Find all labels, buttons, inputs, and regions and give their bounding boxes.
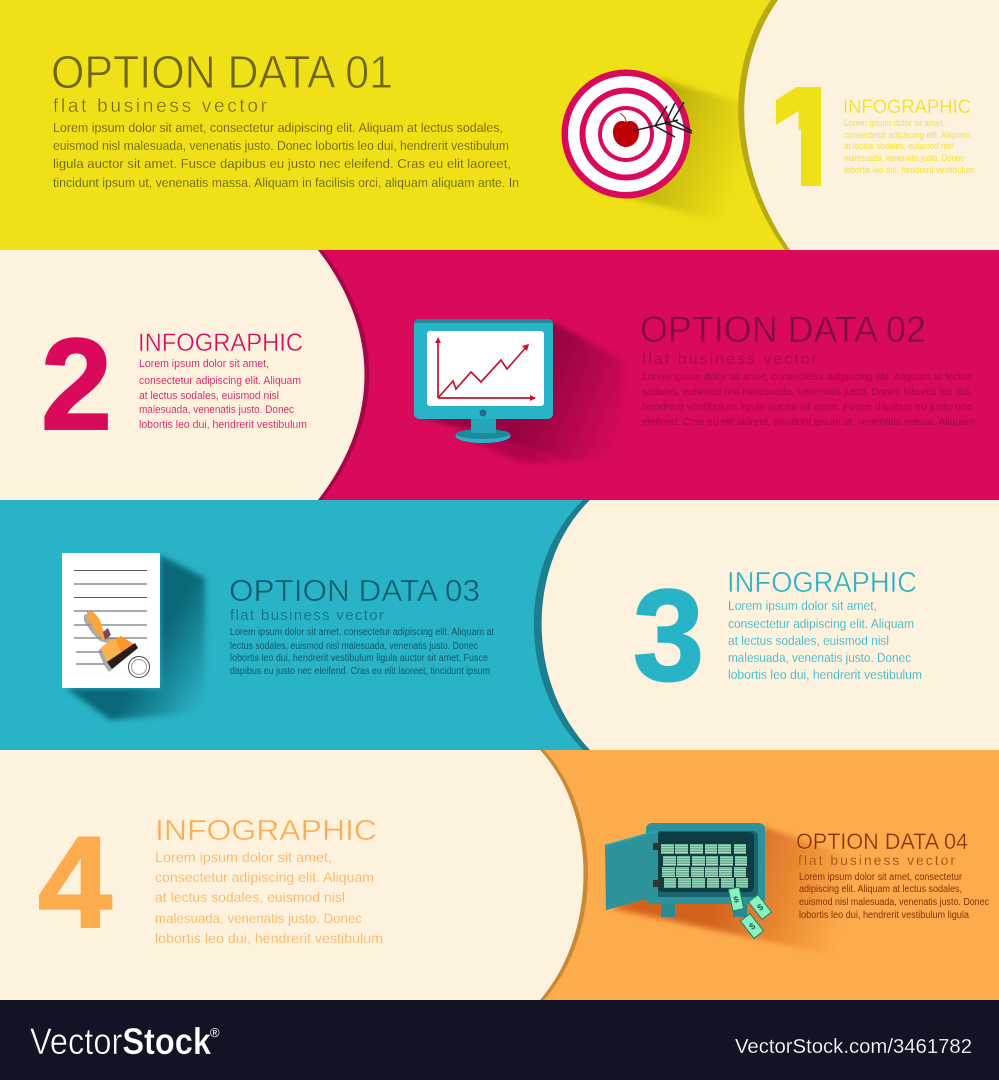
body text 1 xyxy=(53,121,519,190)
number 4: 4 xyxy=(38,809,112,955)
panel: option 04 xyxy=(0,750,999,1000)
side text 1: lobortis leo dui, hendrerit vestibulum xyxy=(844,165,975,175)
body text 1: euismod nisl malesuada, venenatis justo. Donec lobortis leo dui, hendrerit vestibulum xyxy=(53,139,509,153)
icon: target with apple and arrow xyxy=(562,70,750,230)
side text 1: at lectus sodales, euismod nisl xyxy=(844,141,953,151)
side text 2: at lectus sodales, euismod nisl xyxy=(139,390,279,402)
body text 4: Lorem ipsum dolor sit amet, consectetur xyxy=(799,872,963,883)
cream number panel 2 xyxy=(0,250,369,500)
panel: option 02 xyxy=(0,250,999,500)
watermark logo: VectorStock xyxy=(30,1021,211,1062)
side text 4 xyxy=(155,849,383,946)
body text 3 xyxy=(230,627,494,677)
icon: open safe with money: $ xyxy=(733,894,740,905)
side text 4: at lectus sodales, euismod nisl xyxy=(155,889,345,905)
subtitle 1: flat business vector xyxy=(53,96,268,117)
side text 2: malesuada, venenatis justo. Donec xyxy=(139,404,294,416)
body text 4: adipiscing elit. Aliquam at lectus sodales, xyxy=(799,884,962,895)
side text 4: malesuada, venenatis justo. Donec xyxy=(155,910,362,926)
icon: monitor with chart xyxy=(414,319,625,463)
title 3: OPTION DATA 03 xyxy=(229,573,480,608)
side text 3: lobortis leo dui, hendrerit vestibulum xyxy=(728,667,922,682)
body text 2: eleifend. Cras eu elit laoreet, tincidunt ipsum ut, venenatis massa. Aliquam xyxy=(642,416,975,428)
body text 2: hendrerit vestibulum ligula auctor sit amet. Fusce dapibus eu justo nec xyxy=(642,401,972,413)
number 1: 1 xyxy=(769,56,849,217)
side text 2: lobortis leo dui, hendrerit vestibulum xyxy=(139,419,307,431)
side text 1: malesuada, venenatis justo. Donec xyxy=(844,153,964,163)
cream number panel 1 xyxy=(738,0,999,250)
number 2: 2 xyxy=(41,311,112,457)
side text 1 xyxy=(844,118,975,175)
registered mark: ® xyxy=(210,1025,220,1040)
side text 3 xyxy=(728,598,922,682)
side text 4: lobortis leo dui, hendrerit vestibulum xyxy=(155,930,383,946)
panel: option 03 xyxy=(0,500,999,750)
number 3: 3 xyxy=(633,562,704,708)
side text 2: Lorem ipsum dolor sit amet, xyxy=(139,358,269,370)
side text 1: Lorem ipsum dolor sit amet, xyxy=(844,118,945,128)
subtitle 4: flat business vector xyxy=(798,852,955,868)
title 1: OPTION DATA 01 xyxy=(51,46,393,98)
body text 4: lobortis leo dui, hendrerit vestibulum ligula xyxy=(799,910,969,921)
side text 2 xyxy=(139,358,307,431)
icon: open safe with money: $ xyxy=(747,921,757,932)
body text 1: Lorem ipsum dolor sit amet, consectetur adipiscing elit. Aliquam at lectus sodales, xyxy=(53,121,503,135)
body text 2: Lorem ipsum dolor sit amet, consectetur adipiscing elit. Aliquam at lectus xyxy=(642,371,972,383)
infographic label 2: INFOGRAPHIC xyxy=(138,329,303,357)
side text 1: consectetur adipiscing elit. Aliquam xyxy=(844,130,970,140)
cream number panel 3 xyxy=(534,500,999,750)
body text 3: Lorem ipsum dolor sit amet, consectetur adipiscing elit. Aliquam at xyxy=(230,627,494,638)
icon: open safe with money: $ xyxy=(755,902,765,913)
subtitle 2: flat business vector xyxy=(642,351,818,368)
title 4: OPTION DATA 04 xyxy=(796,829,968,854)
side text 4: Lorem ipsum dolor sit amet, xyxy=(155,849,332,865)
body text 4 xyxy=(799,872,989,921)
subtitle 3: flat business vector xyxy=(230,607,384,624)
footer bar xyxy=(0,1000,999,1080)
icon: document with stamp xyxy=(62,553,205,720)
side text 3: consectetur adipiscing elit. Aliquam xyxy=(728,616,914,631)
icon: open safe with money xyxy=(604,823,850,960)
infographic label 1: INFOGRAPHIC xyxy=(843,97,971,118)
body text 3: dapibus eu justo nec eleifend. Cras eu elit laoreet, tincidunt ipsum xyxy=(230,666,490,677)
side text 3: at lectus sodales, euismod nisl xyxy=(728,633,889,648)
body text 1: tincidunt ipsum ut, venenatis massa. Aliquam in facilisis orci, aliquam aliquam ante. In xyxy=(53,176,519,190)
side text 3: Lorem ipsum dolor sit amet, xyxy=(728,598,877,613)
side text 4: consectetur adipiscing elit. Aliquam xyxy=(155,869,374,885)
infographic label 4: INFOGRAPHIC xyxy=(155,815,377,847)
watermark url: VectorStock.com/3461782 xyxy=(735,1036,972,1058)
side text 2: consectetur adipiscing elit. Aliquam xyxy=(139,375,301,387)
body text 3: lobortis leo dui, hendrerit vestibulum ligula auctor sit amet. Fusce xyxy=(230,653,488,664)
infographic label 3: INFOGRAPHIC xyxy=(727,567,917,599)
cream number panel 4 xyxy=(0,750,588,1000)
title 2: OPTION DATA 02 xyxy=(640,309,926,350)
body text 2: sodales, euismod nisl malesuada, venenatis justo. Donec lobortis leo dui, xyxy=(642,386,972,398)
side text 3: malesuada, venenatis justo. Donec xyxy=(728,650,911,665)
body text 1: ligula auctor sit amet. Fusce dapibus eu justo nec eleifend. Cras eu elit laoreet, xyxy=(53,157,511,171)
body text 2 xyxy=(642,371,975,428)
panel: option 01 xyxy=(0,0,999,250)
body text 3: lectus sodales, euismod nisl malesuada, venenatis justo. Donec xyxy=(230,641,478,652)
